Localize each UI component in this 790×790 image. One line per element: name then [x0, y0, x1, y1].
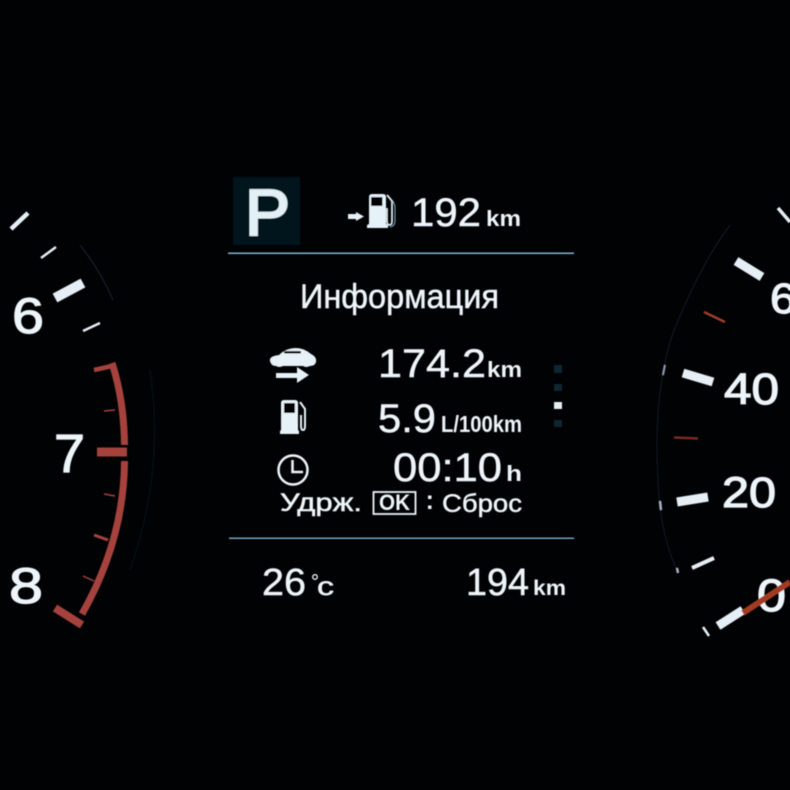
tachometer numerals: 8 — [9, 558, 43, 614]
reset hint: Удрж. — [280, 489, 362, 517]
trip time: 00:10 h: h — [506, 461, 522, 486]
top divider — [228, 252, 574, 254]
range: 192 km: km — [486, 206, 521, 231]
tachometer numerals: 7 — [54, 424, 85, 484]
scroll indicator — [554, 365, 562, 427]
icon: fuel pump — [280, 400, 305, 434]
tachometer red zone — [55, 363, 127, 625]
speedometer white ticks — [677, 208, 790, 636]
icon: clock — [278, 456, 308, 484]
icon: arrow to fuel pump — [348, 194, 395, 228]
bottom divider — [229, 538, 574, 539]
speedometer numerals — [722, 275, 790, 621]
icon: car with arrow — [270, 348, 316, 383]
fuel economy: 5.9 L/100km: L/100km — [441, 411, 522, 437]
heading: Информация — [300, 278, 499, 316]
odometer: 194 km: 194 — [466, 562, 529, 604]
tachometer numerals: 6 — [12, 288, 44, 344]
range: 192 km — [411, 191, 521, 235]
OK button: OK — [379, 490, 410, 515]
tachometer numerals — [9, 288, 85, 614]
speedometer numerals: 20 — [722, 469, 776, 517]
speedometer numerals: 40 — [724, 365, 779, 414]
fuel economy: 5.9 L/100km: 5.9 — [378, 397, 436, 441]
range: 192 km: 192 — [411, 191, 481, 235]
distance: 174.2 km: 174.2 — [378, 342, 486, 386]
trip time: 00:10 h: 00:10 — [393, 446, 502, 490]
speedometer numerals: 0 — [757, 570, 786, 621]
temperature: c — [317, 571, 334, 601]
reset hint — [280, 489, 522, 518]
gear indicator P: P — [245, 176, 290, 249]
odometer: 194 km: km — [533, 577, 566, 600]
odometer: 194 km — [466, 562, 566, 604]
center display — [228, 176, 574, 604]
fuel economy: 5.9 L/100km — [378, 397, 522, 441]
right gauge: speedometer — [657, 208, 790, 636]
temperature — [262, 562, 334, 604]
needle — [743, 582, 790, 613]
distance: 174.2 km: km — [487, 357, 522, 382]
gear indicator P — [233, 176, 300, 249]
speedometer red ticks — [674, 312, 725, 438]
reset hint: Сброс — [442, 490, 522, 518]
distance: 174.2 km — [378, 342, 522, 386]
left gauge: tachometer — [9, 213, 154, 625]
temperature: 26 — [262, 562, 306, 604]
tachometer white ticks — [11, 213, 100, 331]
